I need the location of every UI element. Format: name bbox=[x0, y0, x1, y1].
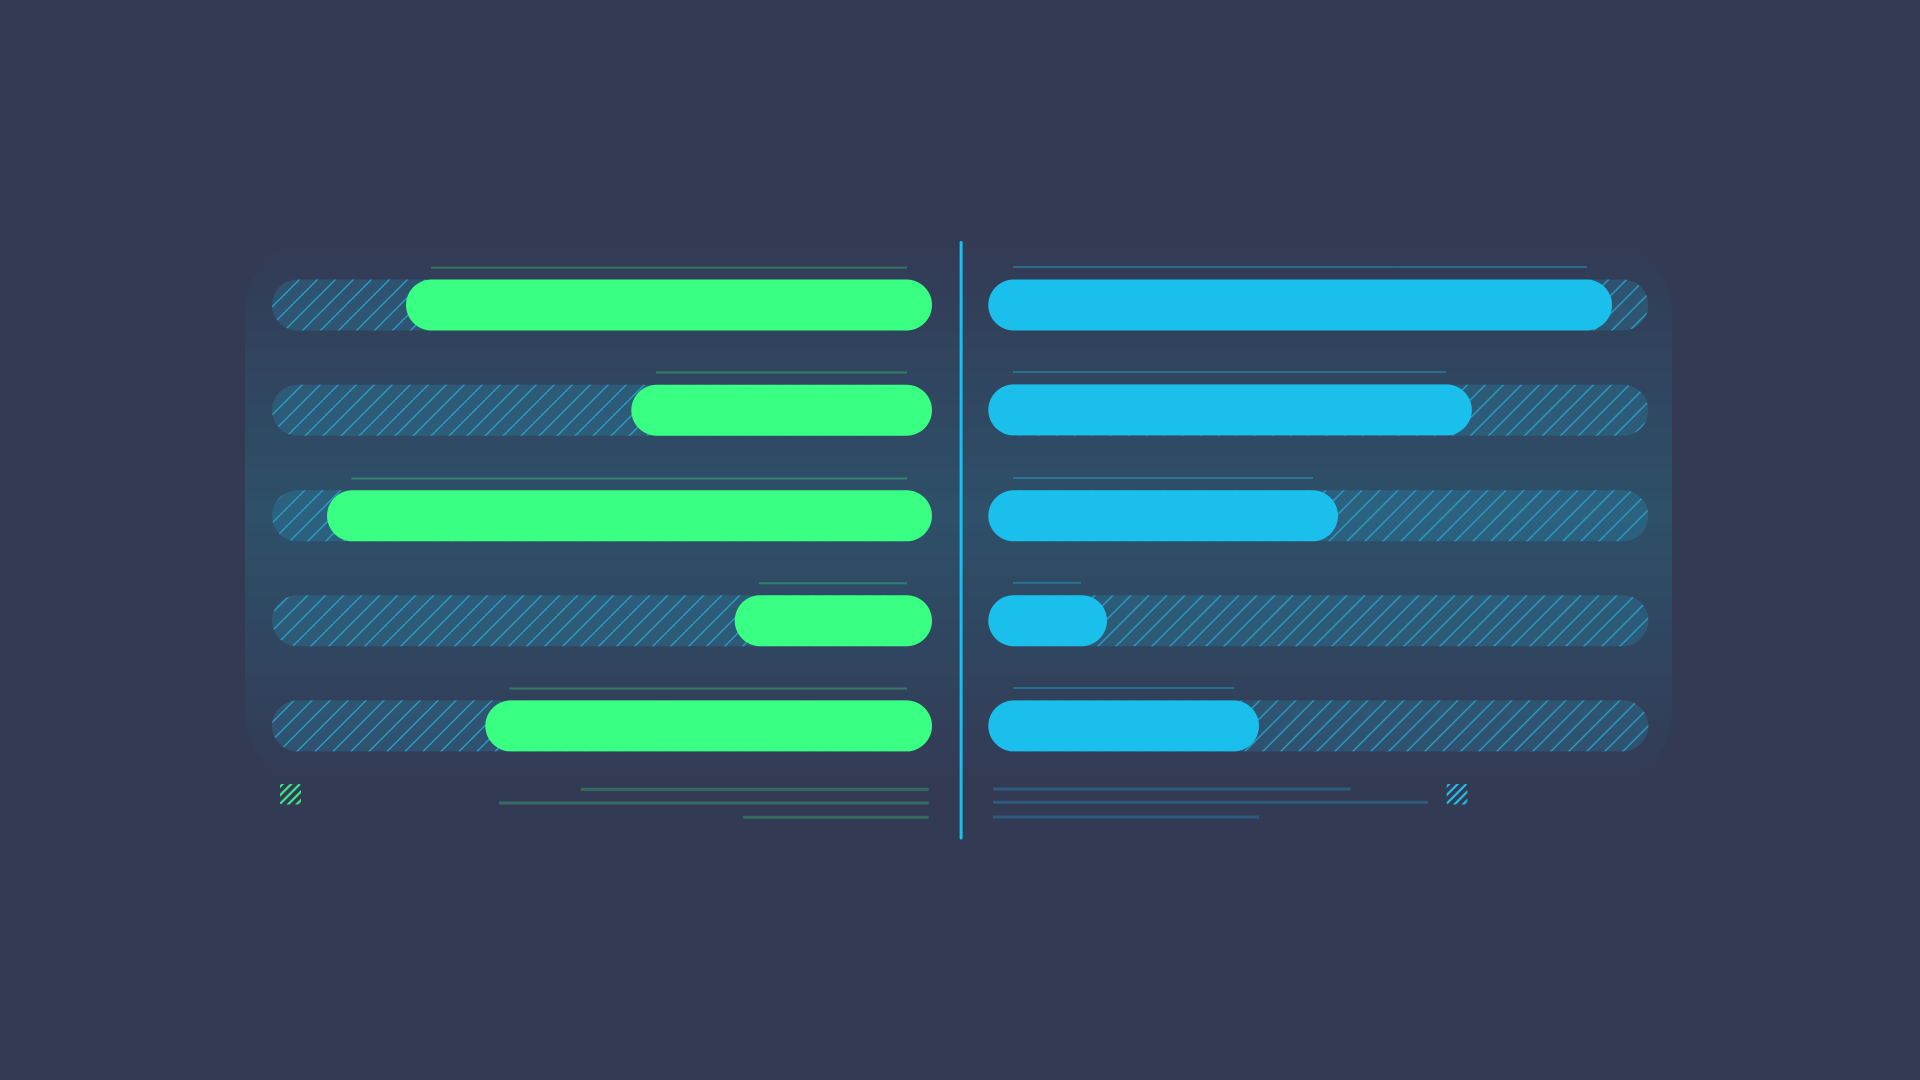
row 1 left bbox=[272, 267, 932, 330]
legend swatch: green hatch bbox=[280, 784, 301, 804]
center divider line bbox=[960, 241, 963, 840]
row 4 right bbox=[988, 582, 1648, 646]
row 3 left bbox=[272, 478, 932, 541]
row 2 left bbox=[272, 372, 932, 436]
left chart: green bars bbox=[272, 267, 932, 751]
legend text lines: right bbox=[993, 788, 1428, 818]
row 5 left bbox=[272, 688, 932, 751]
legend text lines: left bbox=[499, 788, 929, 819]
right chart: blue bars bbox=[988, 266, 1648, 751]
row 4 left bbox=[272, 582, 932, 646]
row 1 right bbox=[988, 266, 1648, 330]
row 5 right bbox=[988, 687, 1648, 751]
row 2 right bbox=[988, 371, 1648, 436]
row 3 right bbox=[988, 477, 1648, 541]
panel: soft background card bbox=[245, 240, 1672, 785]
legend swatch: blue hatch bbox=[1447, 784, 1467, 804]
